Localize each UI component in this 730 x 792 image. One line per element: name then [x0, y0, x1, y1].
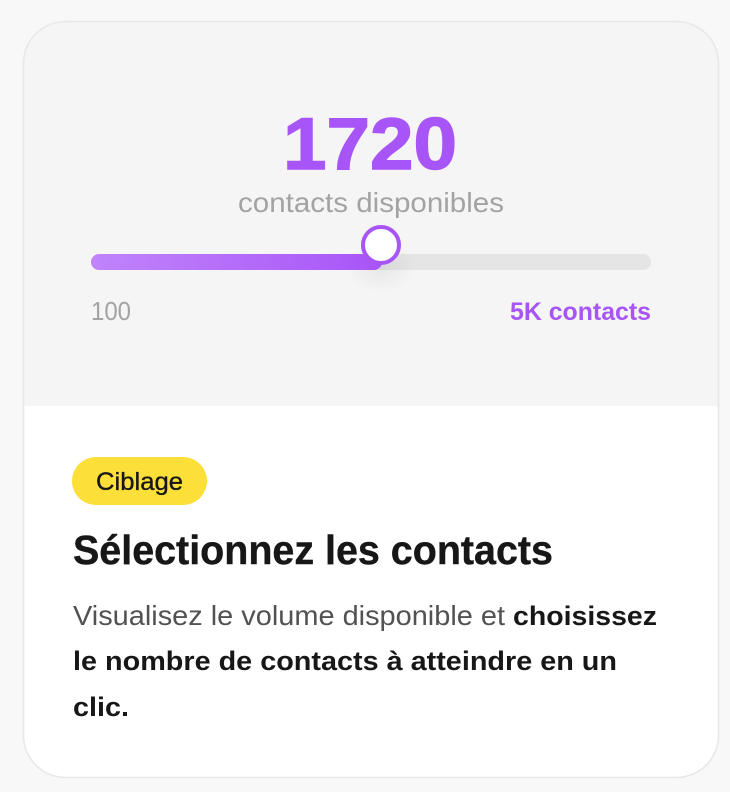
heading: Sélectionnez les contacts — [73, 527, 553, 573]
minimum label: 100 — [91, 296, 131, 326]
big number: 1720 — [283, 104, 457, 185]
maximum label: 5K contacts — [510, 298, 651, 326]
slider track — [91, 254, 651, 270]
panel: slider — [23, 21, 719, 406]
badge — [72, 457, 207, 505]
body text: Visualisez le volume disponible et — [73, 600, 505, 631]
slider fill — [91, 254, 382, 270]
body text: choisissez — [513, 601, 657, 631]
panel: description — [72, 457, 657, 722]
badge: Ciblage — [96, 468, 183, 496]
body text: clic. — [73, 692, 129, 722]
subtitle: contacts disponibles — [238, 187, 504, 218]
slider thumb — [363, 227, 399, 263]
slider — [91, 227, 651, 293]
body text: le nombre de contacts à atteindre en un — [73, 646, 617, 676]
body text — [73, 600, 657, 722]
